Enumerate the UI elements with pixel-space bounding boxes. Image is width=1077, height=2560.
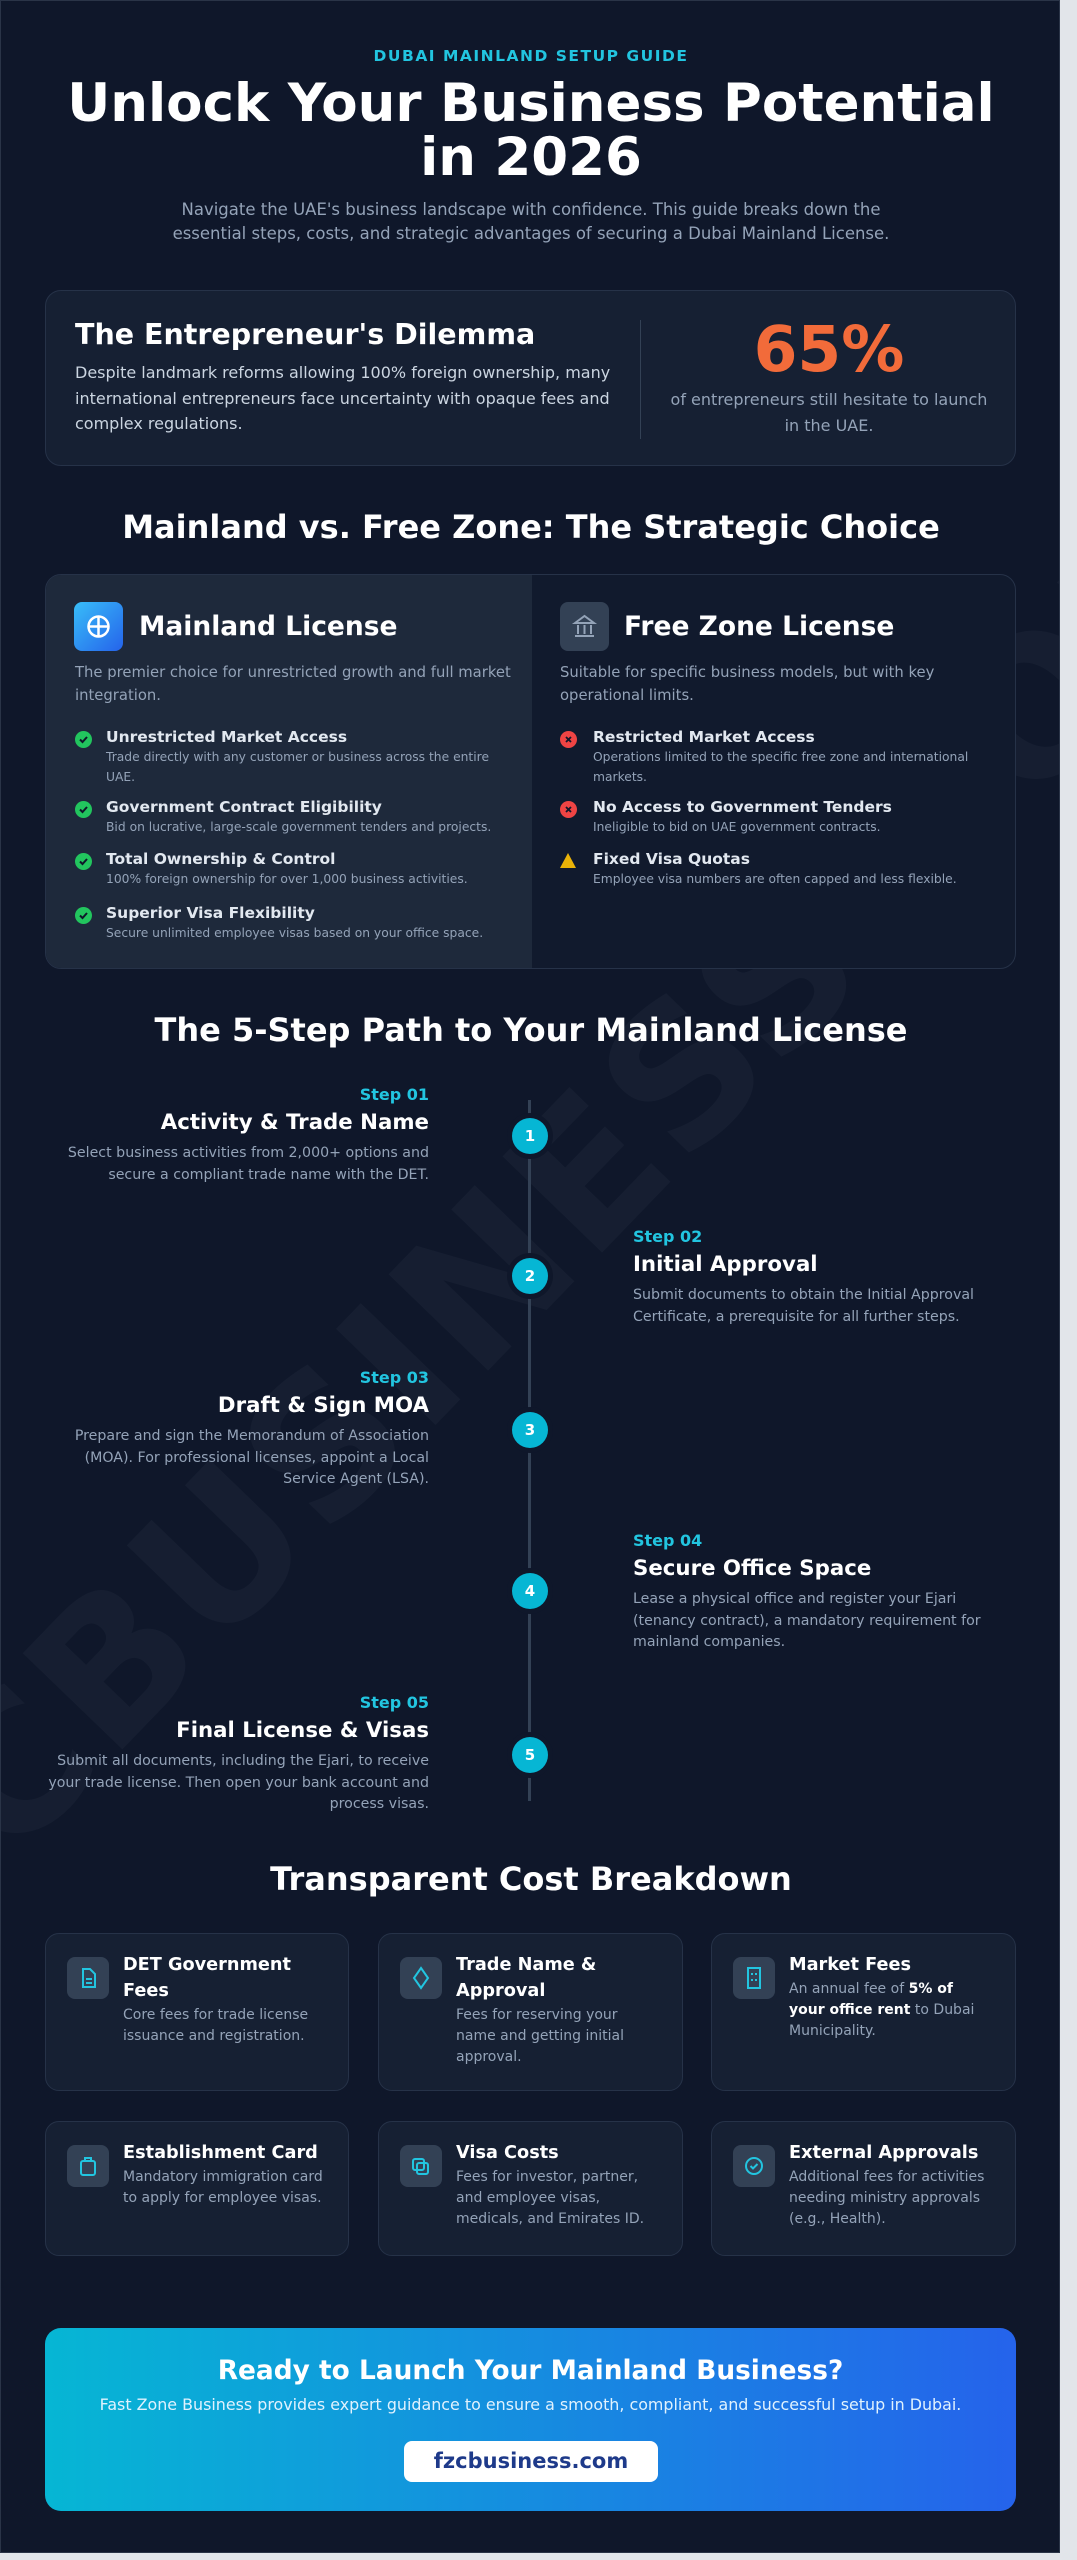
panel: mainland xyxy=(46,575,532,970)
item list: Trade directly with any customer or business across the entire UAE. xyxy=(106,750,489,784)
CTA button xyxy=(404,2441,658,2482)
step 3: Prepare and sign the Memorandum of Association (MOA). For professional licenses, appoint a Local Service Agent (LSA). xyxy=(75,1428,429,1487)
cost card: establishment card: Establishment Card xyxy=(123,2143,318,2163)
step 3: Step 03 xyxy=(360,1368,429,1387)
cost card: market fees: Market Fees xyxy=(789,1955,911,1975)
item list: Total Ownership & Control xyxy=(106,850,335,868)
intro paragraph: Navigate the UAE's business landscape with confidence. This guide breaks down the essential steps, costs, and strategic advantages of securing a Dubai Mainland License. xyxy=(173,200,889,243)
item list: Restricted Market Access xyxy=(593,728,815,746)
cost card: market fees: An annual fee of 5% of your office rent to Dubai Municipality. xyxy=(789,1981,974,2039)
item list: Government Contract Eligibility xyxy=(106,798,382,816)
step 5: Step 05 xyxy=(360,1693,429,1712)
step 1: Select business activities from 2,000+ options and secure a compliant trade name with the DET. xyxy=(68,1145,429,1182)
cost card: market fees xyxy=(711,1933,1016,2091)
item list: Operations limited to the specific free zone and international markets. xyxy=(593,750,968,784)
step 1: Step 01 xyxy=(360,1085,429,1104)
heading: cost breakdown: Transparent Cost Breakdown xyxy=(270,1860,792,1898)
dilemma text: Despite landmark reforms allowing 100% foreign ownership, many international entrepreneurs face uncertainty with opaque fees and complex regulations. xyxy=(75,363,610,433)
title: Unlock Your Business Potential xyxy=(67,73,995,134)
item list: Secure unlimited employee visas based on your office space. xyxy=(106,926,483,940)
step 4: Step 04 xyxy=(633,1531,702,1550)
cost card: visa costs: Visa Costs xyxy=(456,2143,559,2163)
icon: tag xyxy=(400,1957,442,1999)
icon: globe xyxy=(74,602,123,651)
cost card: trade name: Fees for reserving your name and getting initial approval. xyxy=(456,2007,624,2065)
timeline: 3 xyxy=(525,1421,535,1439)
step 2 xyxy=(633,1227,974,1324)
cost card: external approvals xyxy=(711,2121,1016,2256)
step 4: Lease a physical office and register your Ejari (tenancy contract), a mandatory requirement for mainland companies. xyxy=(633,1591,981,1650)
item list: Employee visa numbers are often capped and less flexible. xyxy=(593,872,957,886)
icon: bank xyxy=(560,602,609,651)
CTA subtitle: Fast Zone Business provides expert guidance to ensure a smooth, compliant, and successful setup in Dubai. xyxy=(100,2395,961,2414)
item list: Bid on lucrative, large-scale government tenders and projects. xyxy=(106,820,491,834)
cost card: DET fees: DET Government Fees xyxy=(123,1955,291,2001)
panel: comparison xyxy=(45,574,1016,969)
step 4 xyxy=(633,1531,981,1650)
cost card: external approvals: Additional fees for activities needing ministry approvals (e.g., Health). xyxy=(789,2169,984,2227)
CTA panel xyxy=(45,2328,1016,2511)
item list: Superior Visa Flexibility xyxy=(106,904,315,922)
cost card: establishment card: Mandatory immigration card to apply for employee visas. xyxy=(123,2169,323,2206)
step 2: Step 02 xyxy=(633,1227,702,1246)
dilemma heading: The Entrepreneur's Dilemma xyxy=(75,318,535,351)
cost card: trade name xyxy=(378,1933,683,2091)
timeline: 4 xyxy=(525,1582,535,1600)
item list: Ineligible to bid on UAE government contracts. xyxy=(593,820,881,834)
mainland title: Mainland License xyxy=(139,611,398,642)
step 1: Activity & Trade Name xyxy=(161,1110,429,1135)
CTA button: fzcbusiness.com xyxy=(434,2449,628,2473)
icon: building xyxy=(733,1957,775,1999)
panel: dilemma xyxy=(45,290,1016,466)
cost card: DET fees xyxy=(45,1933,349,2091)
stat caption: of entrepreneurs still hesitate to launch in the UAE. xyxy=(671,390,987,435)
step 1 xyxy=(68,1085,429,1182)
item list: No Access to Government Tenders xyxy=(593,798,892,816)
step 3 xyxy=(75,1368,429,1487)
item list xyxy=(75,728,491,940)
stat 65%: 65% xyxy=(754,313,904,386)
title xyxy=(67,73,995,188)
step 2: Submit documents to obtain the Initial Approval Certificate, a prerequisite for all further steps. xyxy=(633,1287,974,1324)
free zone title: Free Zone License xyxy=(624,611,894,642)
cost card: visa costs xyxy=(378,2121,683,2256)
CTA title: Ready to Launch Your Mainland Business? xyxy=(218,2355,843,2386)
mainland desc: The premier choice for unrestricted growth and full market integration. xyxy=(75,664,511,704)
cost card: DET fees: Core fees for trade license issuance and registration. xyxy=(123,2007,308,2044)
timeline xyxy=(512,1100,548,1801)
item list: 100% foreign ownership for over 1,000 business activities. xyxy=(106,872,468,886)
heading: mainland vs free zone: Mainland vs. Free Zone: The Strategic Choice xyxy=(122,508,940,546)
item list xyxy=(560,728,968,886)
timeline: 1 xyxy=(525,1127,535,1145)
item list: Fixed Visa Quotas xyxy=(593,850,750,868)
cost card: external approvals: External Approvals xyxy=(789,2143,978,2163)
cost card: trade name: Trade Name & Approval xyxy=(456,1955,596,2001)
step 5: Final License & Visas xyxy=(176,1718,429,1743)
cost card: visa costs: Fees for investor, partner, and employee visas, medicals, and Emirates ID. xyxy=(456,2169,644,2227)
cost card: establishment card xyxy=(45,2121,349,2256)
kicker: DUBAI MAINLAND SETUP GUIDE xyxy=(374,47,688,65)
icon: briefcase xyxy=(67,2145,109,2187)
free zone desc: Suitable for specific business models, but with key operational limits. xyxy=(560,664,934,704)
icon: badge check xyxy=(733,2145,775,2187)
panel: free zone xyxy=(560,602,968,886)
icon: passport xyxy=(400,2145,442,2187)
timeline: 5 xyxy=(525,1746,535,1764)
step 5: Submit all documents, including the Ejari, to receive your trade license. Then open your bank account and process visas. xyxy=(48,1753,429,1812)
step 3: Draft & Sign MOA xyxy=(218,1393,429,1418)
step 5 xyxy=(48,1693,429,1812)
timeline: 2 xyxy=(525,1267,535,1285)
title: in 2026 xyxy=(420,127,642,188)
heading: 5-step path: The 5-Step Path to Your Mainland License xyxy=(154,1011,907,1049)
icon: document xyxy=(67,1957,109,1999)
item list: Unrestricted Market Access xyxy=(106,728,347,746)
step 2: Initial Approval xyxy=(633,1252,818,1277)
step 4: Secure Office Space xyxy=(633,1556,871,1581)
